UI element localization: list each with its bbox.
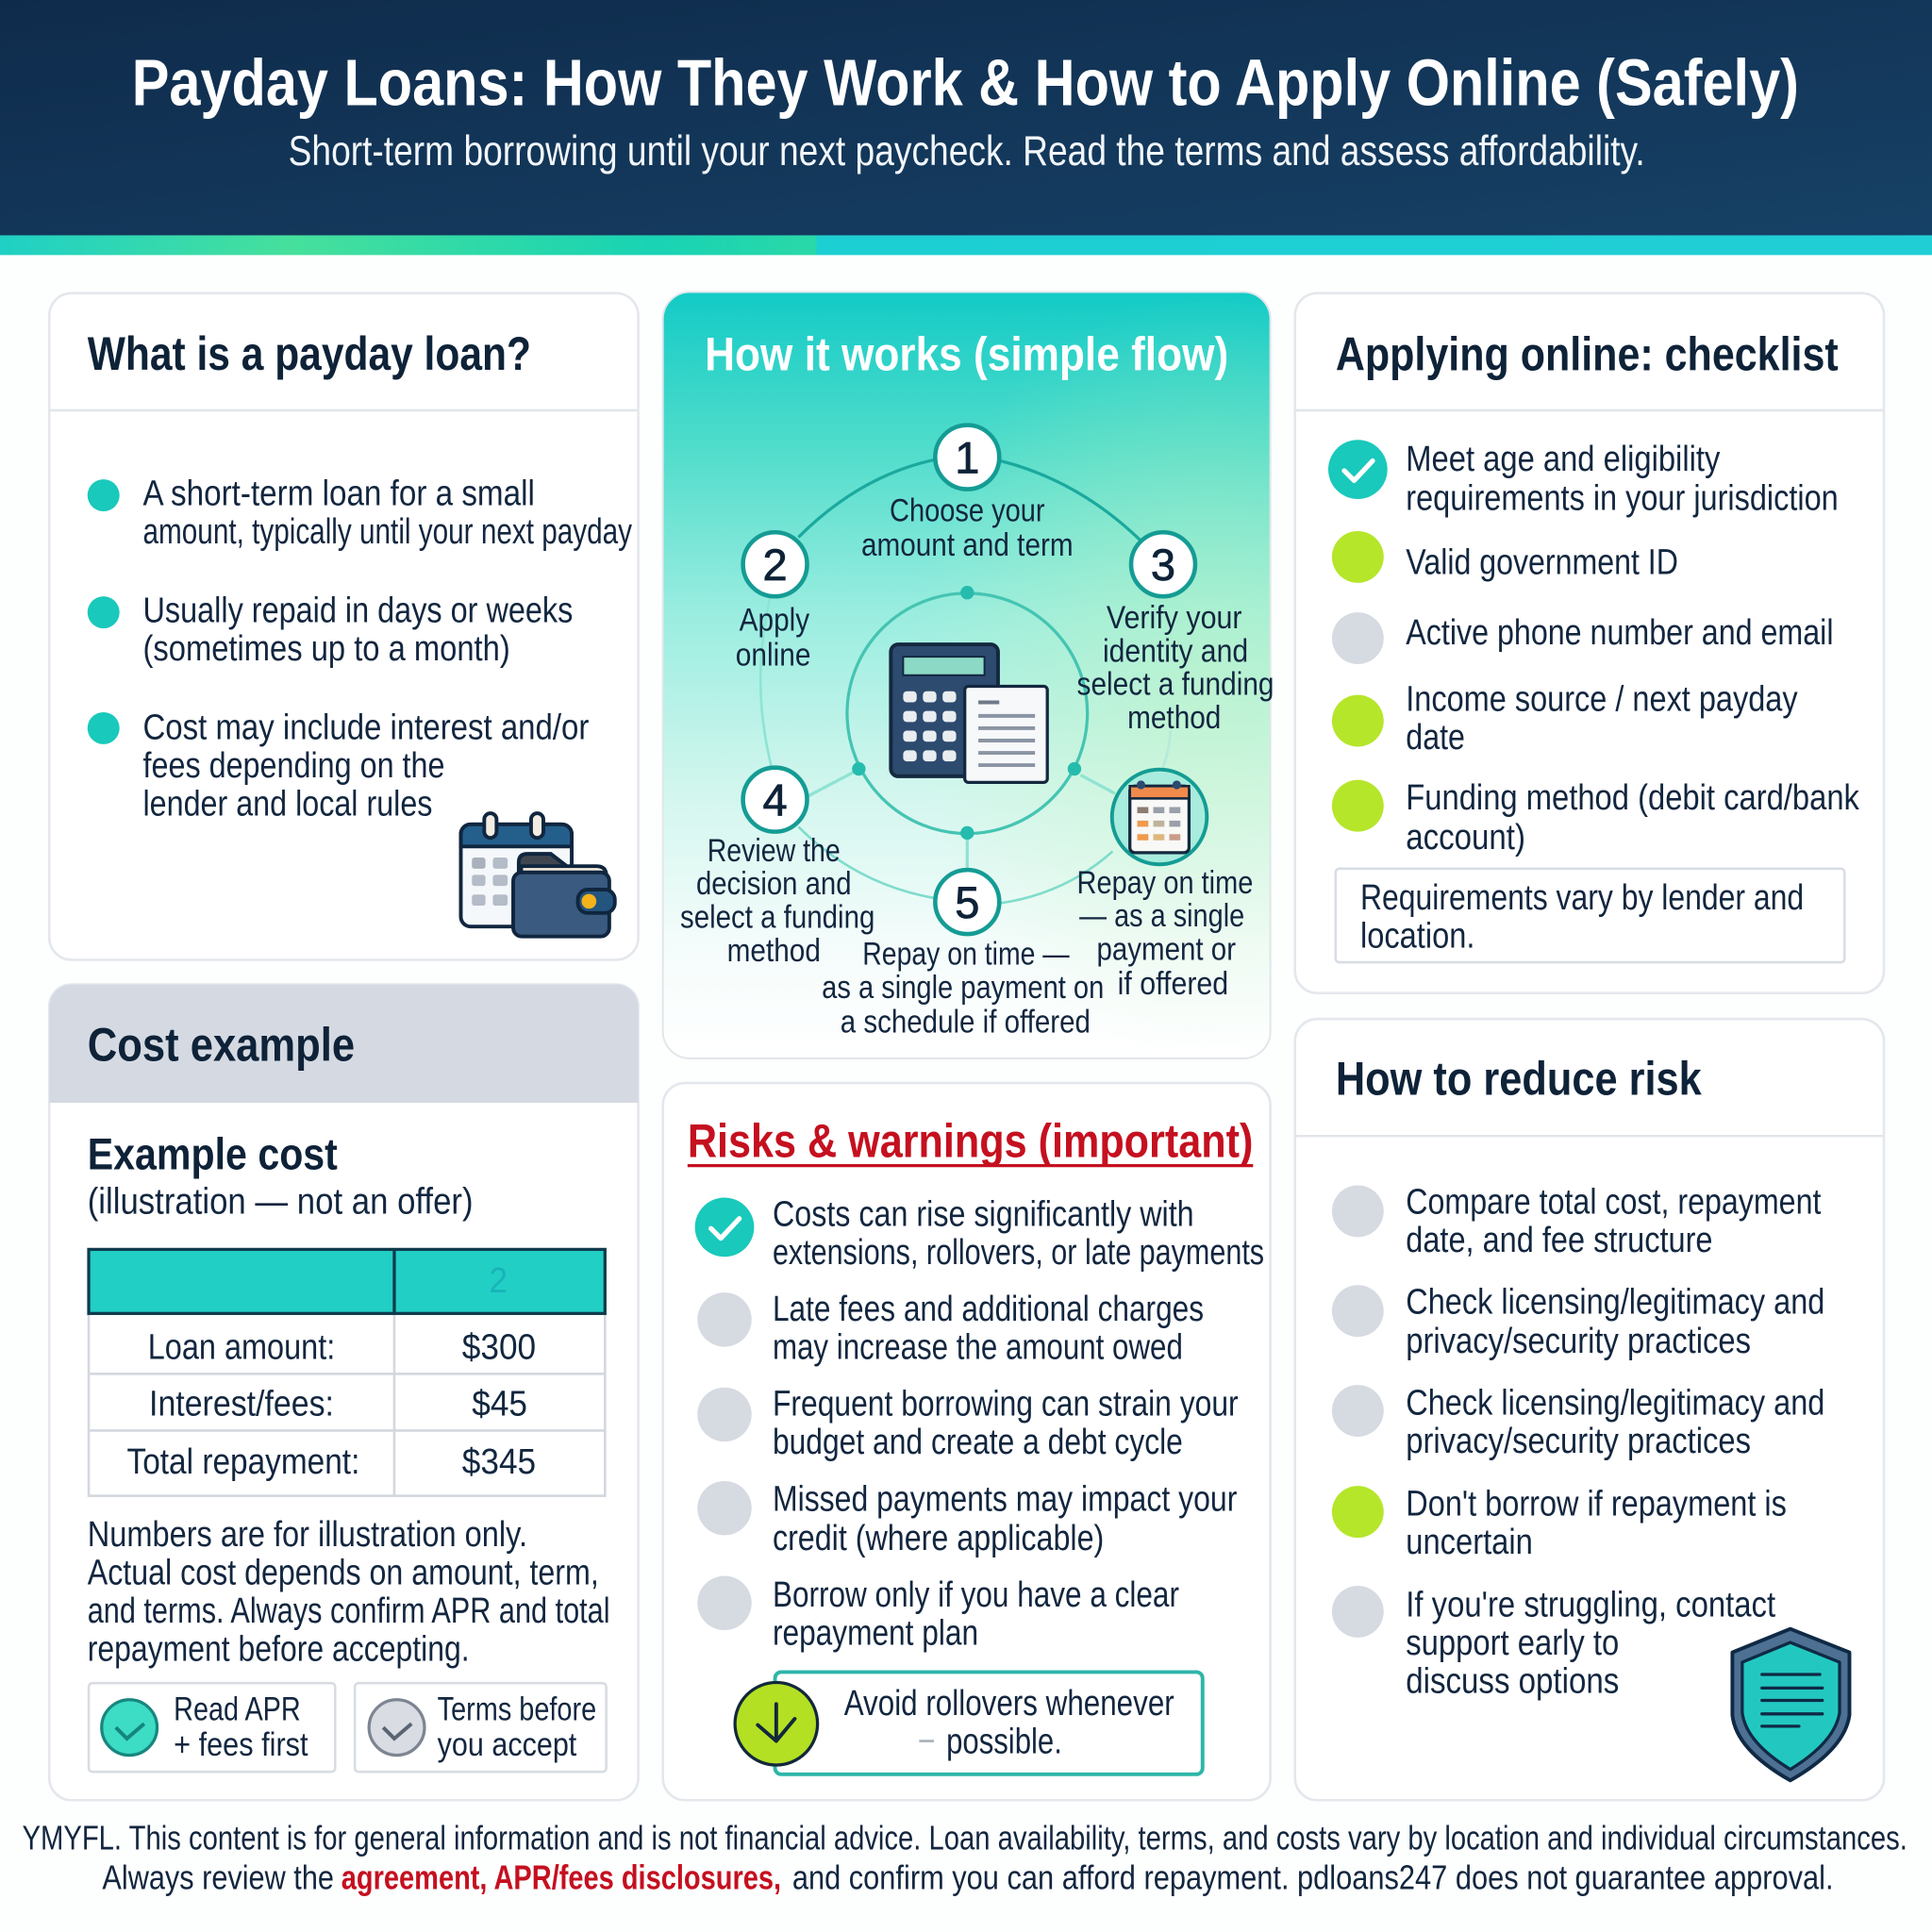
step 3 bbox=[1077, 532, 1274, 736]
tip: struggling: If you're struggling, contact bbox=[1406, 1586, 1776, 1625]
check: funding method bbox=[1332, 778, 1859, 858]
tip: terms before you accept bbox=[355, 1683, 607, 1772]
step: repay with calendar icon: payment or bbox=[1096, 931, 1236, 967]
step 4 bbox=[680, 768, 874, 969]
step 5 bbox=[822, 870, 1104, 1041]
paragraph: numbers are for illustration: Numbers are for illustration only. bbox=[88, 1515, 527, 1555]
check: government ID bbox=[1332, 531, 1678, 583]
tip: read APR: + fees first bbox=[174, 1726, 308, 1763]
heading: checklist: Applying online: checklist bbox=[1336, 327, 1839, 380]
bullet: cost: fees depending on the bbox=[143, 746, 445, 786]
risk: frequent borrowing: budget and create a debt cycle bbox=[773, 1423, 1183, 1462]
panel: what is a payday loan bbox=[49, 293, 639, 959]
risk: late fees: may increase the amount owed bbox=[773, 1328, 1183, 1368]
callout: avoid rollovers: Avoid rollovers whenever bbox=[844, 1684, 1174, 1724]
bullet: repaid in days: (sometimes up to a month) bbox=[143, 629, 510, 669]
panel: cost example bbox=[49, 985, 639, 1800]
tip: compare total cost bbox=[1332, 1183, 1822, 1260]
step: repay with calendar icon bbox=[1077, 770, 1253, 1002]
note: requirements vary: Requirements vary by lender and bbox=[1360, 878, 1804, 918]
step 5: Repay on time — bbox=[862, 937, 1070, 973]
heading: cost example: Cost example bbox=[88, 1019, 355, 1072]
step 5: a schedule if offered bbox=[841, 1005, 1091, 1041]
step 4: 4 bbox=[762, 775, 788, 825]
check: income source: Income source / next payday bbox=[1406, 680, 1798, 720]
heading: what is a payday loan: What is a payday loan? bbox=[88, 327, 531, 380]
step 4: Review the bbox=[708, 833, 841, 869]
risk: costs can rise bbox=[695, 1195, 1264, 1273]
step: repay with calendar icon: — as a single bbox=[1079, 898, 1244, 934]
risk: frequent borrowing bbox=[697, 1385, 1239, 1462]
step 3: 3 bbox=[1151, 540, 1175, 590]
tip: check licensing: privacy/security practices bbox=[1406, 1322, 1751, 1361]
risk: borrow only bbox=[697, 1575, 1179, 1654]
table: loan cost bbox=[89, 1249, 605, 1496]
tip: read APR bbox=[89, 1683, 335, 1772]
icon: calendar and wallet bbox=[460, 813, 615, 937]
tip: check licensing repeat: Check licensing/legitimacy and bbox=[1406, 1383, 1824, 1423]
risk: late fees: Late fees and additional charges bbox=[773, 1290, 1204, 1329]
table: loan cost: $45 bbox=[472, 1385, 527, 1424]
bullet: repaid in days: Usually repaid in days or weeks bbox=[143, 591, 573, 631]
step 2: 2 bbox=[762, 540, 788, 590]
table: loan cost: Loan amount: bbox=[148, 1328, 335, 1368]
note: illustration: (illustration — not an offer) bbox=[88, 1182, 474, 1223]
step 5: 5 bbox=[955, 877, 979, 927]
risk: missed payments bbox=[697, 1479, 1237, 1558]
panel: risks and warnings bbox=[663, 1083, 1271, 1800]
tip: check licensing repeat bbox=[1332, 1383, 1824, 1461]
step 2: online bbox=[736, 637, 810, 673]
paragraph: numbers are for illustration bbox=[88, 1515, 610, 1670]
tip: compare total cost: date, and fee structure bbox=[1406, 1221, 1713, 1260]
flow rings bbox=[760, 459, 1171, 903]
footer disclaimer: agreement, APR/fees disclosures, bbox=[341, 1857, 781, 1896]
bullet: cost: lender and local rules bbox=[143, 785, 432, 824]
risk: borrow only: repayment plan bbox=[773, 1614, 978, 1654]
bullet: cost: Cost may include interest and/or bbox=[143, 708, 589, 748]
step 3: Verify your bbox=[1107, 600, 1242, 636]
tip: check licensing: Check licensing/legitimacy and bbox=[1406, 1282, 1824, 1322]
subtitle: Short-term borrowing until your next paycheck. Read the terms and assess affordability. bbox=[289, 128, 1645, 175]
bullet: cost bbox=[88, 708, 589, 824]
paragraph: numbers are for illustration: repayment before accepting. bbox=[88, 1630, 470, 1670]
step: repay with calendar icon: if offered bbox=[1118, 966, 1228, 1002]
step 4: method bbox=[727, 933, 821, 969]
check: phone and email bbox=[1332, 612, 1834, 664]
step 4: select a funding bbox=[680, 900, 874, 936]
check: funding method: account) bbox=[1406, 818, 1525, 858]
risk: late fees bbox=[697, 1290, 1204, 1368]
step 1: 1 bbox=[955, 433, 979, 483]
ring dots bbox=[852, 586, 1081, 840]
heading: risks and warnings: Risks & warnings (important) bbox=[688, 1114, 1253, 1167]
step 3: select a funding bbox=[1077, 667, 1274, 703]
step 5: as a single payment on bbox=[822, 970, 1104, 1006]
check: income source: date bbox=[1406, 718, 1465, 758]
header banner bbox=[0, 0, 1932, 255]
heading: reduce risk: How to reduce risk bbox=[1336, 1052, 1702, 1105]
check: age and eligibility: requirements in your jurisdiction bbox=[1406, 479, 1839, 519]
step 2 bbox=[736, 532, 810, 673]
footer disclaimer bbox=[23, 1818, 1907, 1896]
check: income source bbox=[1332, 680, 1798, 758]
tip: don't borrow: Don't borrow if repayment is bbox=[1406, 1485, 1787, 1524]
callout: avoid rollovers: possible. bbox=[946, 1723, 1062, 1762]
callout: avoid rollovers bbox=[735, 1672, 1203, 1774]
bullet: short-term loan bbox=[88, 475, 632, 552]
paragraph: numbers are for illustration: Actual cost depends on amount, term, bbox=[88, 1554, 599, 1593]
risk: missed payments: credit (where applicable) bbox=[773, 1519, 1104, 1558]
step 3: identity and bbox=[1103, 633, 1248, 669]
check: funding method: Funding method (debit card/bank bbox=[1406, 778, 1859, 818]
tip: check licensing bbox=[1332, 1282, 1824, 1361]
subheading: example cost: Example cost bbox=[88, 1129, 338, 1179]
table: loan cost: Total repayment: bbox=[127, 1442, 359, 1482]
paragraph: numbers are for illustration: and terms. Always confirm APR and total bbox=[88, 1591, 610, 1631]
risk: missed payments: Missed payments may impact your bbox=[773, 1479, 1237, 1519]
check: age and eligibility bbox=[1328, 440, 1839, 519]
tip: check licensing repeat: privacy/security practices bbox=[1406, 1422, 1751, 1461]
table: loan cost: $345 bbox=[462, 1442, 536, 1482]
step 1: Choose your bbox=[890, 492, 1045, 528]
tip: struggling: discuss options bbox=[1406, 1662, 1619, 1702]
tip: compare total cost: Compare total cost, repayment bbox=[1406, 1183, 1822, 1223]
table: loan cost: 2 bbox=[490, 1261, 508, 1301]
note: requirements vary: location. bbox=[1360, 916, 1474, 956]
table: loan cost: Interest/fees: bbox=[149, 1385, 334, 1424]
step 1: amount and term bbox=[861, 527, 1074, 563]
check: age and eligibility: Meet age and eligibility bbox=[1406, 440, 1720, 479]
note: requirements vary bbox=[1336, 869, 1844, 962]
footer disclaimer: Always review the bbox=[102, 1857, 334, 1896]
step 4: decision and bbox=[696, 866, 852, 902]
bullet: short-term loan: amount, typically until your next payday bbox=[143, 512, 632, 552]
risk: costs can rise: extensions, rollovers, or late payments bbox=[773, 1233, 1264, 1273]
step 2: Apply bbox=[740, 603, 810, 639]
risk: frequent borrowing: Frequent borrowing can strain your bbox=[773, 1385, 1239, 1424]
icon: shield bbox=[1732, 1629, 1849, 1780]
tip: don't borrow bbox=[1332, 1485, 1787, 1562]
risk: costs can rise: Costs can rise significantly with bbox=[773, 1195, 1194, 1235]
tip: struggling bbox=[1332, 1586, 1776, 1702]
bullet: short-term loan: A short-term loan for a small bbox=[143, 475, 535, 514]
panel: how to reduce risk bbox=[1295, 1019, 1884, 1800]
panel: applying online checklist bbox=[1295, 293, 1884, 993]
icon: calculator and document bbox=[891, 644, 1047, 782]
check: government ID: Valid government ID bbox=[1406, 543, 1678, 583]
tip: don't borrow: uncertain bbox=[1406, 1523, 1533, 1562]
tip: read APR: Read APR bbox=[174, 1690, 301, 1727]
step 1 bbox=[861, 425, 1074, 563]
heading: how it works: How it works (simple flow) bbox=[705, 327, 1228, 380]
table: loan cost: $300 bbox=[462, 1328, 536, 1368]
tip: struggling: support early to bbox=[1406, 1624, 1619, 1663]
tip: terms before you accept: Terms before bbox=[438, 1690, 596, 1727]
bullet: repaid in days bbox=[88, 591, 573, 669]
check: phone and email: Active phone number and email bbox=[1406, 613, 1834, 653]
panel: how it works bbox=[663, 292, 1274, 1058]
risk: borrow only: Borrow only if you have a clear bbox=[773, 1575, 1179, 1615]
step 3: method bbox=[1127, 700, 1221, 736]
step: repay with calendar icon: Repay on time bbox=[1077, 865, 1253, 901]
tip: terms before you accept: you accept bbox=[438, 1726, 576, 1763]
